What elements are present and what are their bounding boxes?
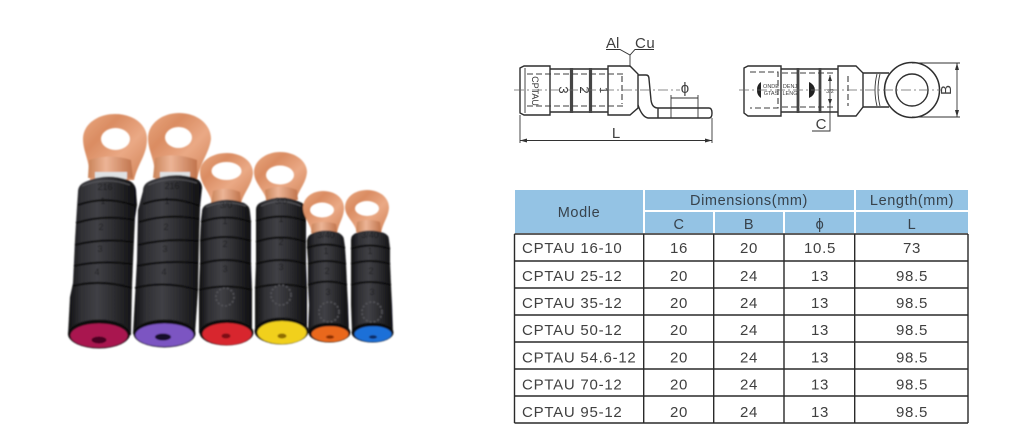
lug 4: yellow end: 3/0	[275, 196, 287, 206]
L dimension	[520, 115, 712, 143]
side view body: 2	[577, 86, 592, 94]
lug 6: blue end: 3/40	[361, 230, 379, 240]
Al and Cu labels	[606, 35, 655, 67]
row CPTAU 50-12	[522, 322, 928, 339]
product photo: six cable lugs	[68, 113, 394, 348]
row CPTAU 50-12: 98.5	[896, 322, 928, 339]
top view body: LENG	[783, 91, 797, 97]
row CPTAU 25-12: 13	[811, 268, 829, 285]
lug 1: crimson end: 3	[97, 244, 103, 254]
row CPTAU 25-12: CPTAU 25-12	[522, 268, 623, 285]
lug 2: purple end: 1	[164, 196, 170, 206]
row CPTAU 54.6-12: 20	[670, 350, 688, 366]
top view body: GTAS	[764, 91, 779, 97]
B dimension: B	[938, 85, 955, 95]
specification table	[514, 190, 968, 423]
row CPTAU 70-12	[522, 376, 928, 394]
lug 2: purple end: 3	[162, 244, 168, 254]
row CPTAU 54.6-12: 98.5	[896, 350, 928, 366]
side view body: 3	[556, 86, 571, 94]
row CPTAU 35-12	[522, 295, 928, 312]
lug 1: crimson end: 2	[98, 222, 104, 232]
row CPTAU 70-12: 98.5	[896, 376, 928, 394]
table grid	[514, 234, 968, 423]
lug 1: crimson end: 1	[100, 196, 106, 206]
top view body	[744, 66, 863, 116]
row CPTAU 35-12: 20	[670, 295, 688, 312]
row CPTAU 70-12: 13	[811, 376, 829, 394]
row CPTAU 16-10	[522, 240, 921, 257]
lug 2: purple end: 216	[164, 181, 180, 191]
row CPTAU 54.6-12: 24	[740, 350, 758, 366]
lug 6: blue end	[345, 190, 394, 342]
technical drawing: side view	[514, 35, 712, 143]
lug 6: blue end: 3	[369, 287, 375, 297]
top view body: 3/2	[826, 89, 834, 95]
row CPTAU 95-12	[522, 404, 928, 421]
table header	[515, 190, 968, 233]
lug 3: red end	[199, 153, 254, 346]
lug 3: red end: 3	[222, 264, 228, 274]
lug 6: blue end: 2	[368, 266, 374, 276]
row CPTAU 70-12: CPTAU 70-12	[522, 376, 623, 394]
row CPTAU 54.6-12: 13	[811, 350, 829, 366]
C dimension: C	[816, 116, 827, 133]
row CPTAU 35-12: 13	[811, 295, 829, 312]
Al and Cu labels: Al	[606, 35, 619, 52]
table header: B	[744, 217, 754, 233]
row CPTAU 70-12: 20	[670, 376, 688, 394]
row CPTAU 25-12: 24	[740, 268, 758, 285]
row CPTAU 95-12: 13	[811, 404, 829, 421]
side view body: CPTAU	[530, 76, 540, 106]
top view ring terminal	[863, 62, 940, 118]
lug 2: purple end: 4	[161, 267, 167, 277]
table header: ϕ	[816, 217, 824, 233]
lug 3: red end: 2	[222, 239, 228, 249]
Al and Cu labels: Cu	[635, 35, 655, 52]
lug 3: red end: 1	[222, 216, 228, 226]
lug 6: blue end: 1	[367, 246, 373, 256]
row CPTAU 16-10: 10.5	[804, 240, 836, 257]
row CPTAU 95-12: 98.5	[896, 404, 928, 421]
lug 1: crimson end	[68, 114, 147, 348]
row CPTAU 54.6-12	[522, 350, 928, 366]
row CPTAU 35-12: 24	[740, 295, 758, 312]
row CPTAU 16-10: 73	[903, 240, 921, 257]
lug 3: red end: 3/0	[220, 200, 232, 210]
lug 4: yellow end: 1	[278, 214, 284, 224]
row CPTAU 50-12: 24	[740, 322, 758, 339]
row CPTAU 95-12: 20	[670, 404, 688, 421]
row CPTAU 95-12: 24	[740, 404, 758, 421]
lug 2: purple end: 2	[163, 222, 169, 232]
B dimension	[912, 63, 960, 117]
table header: Length(mm)	[870, 193, 954, 209]
C dimension	[812, 75, 832, 133]
lug 1: crimson end: 216	[97, 182, 113, 192]
lug 4: yellow end	[254, 152, 308, 344]
lug 5: orange end: 3/40	[317, 230, 335, 240]
table header: C	[673, 217, 685, 233]
row CPTAU 50-12: CPTAU 50-12	[522, 322, 623, 339]
lug 2: purple end	[133, 113, 211, 348]
side view body	[520, 66, 638, 115]
table header: Modle	[558, 205, 600, 221]
row CPTAU 54.6-12: CPTAU 54.6-12	[522, 350, 637, 366]
row CPTAU 25-12: 20	[670, 268, 688, 285]
lug 5: orange end: 2	[324, 266, 330, 276]
row CPTAU 95-12: CPTAU 95-12	[522, 404, 623, 421]
row CPTAU 70-12: 24	[740, 376, 758, 394]
row CPTAU 16-10: 16	[670, 240, 688, 257]
side view copper tab	[638, 75, 712, 118]
lug 5: orange end	[303, 191, 350, 342]
row CPTAU 35-12: CPTAU 35-12	[522, 295, 623, 312]
L dimension: L	[612, 125, 620, 142]
side view body: 1	[597, 87, 609, 93]
row CPTAU 16-10: 20	[740, 240, 758, 257]
phi dimension	[671, 80, 698, 118]
row CPTAU 25-12	[522, 268, 928, 285]
centre line	[514, 89, 680, 91]
table header: Dimensions(mm)	[690, 193, 808, 209]
row CPTAU 50-12: 20	[670, 322, 688, 339]
row CPTAU 25-12: 98.5	[896, 268, 928, 285]
lug 5: orange end: 3	[325, 287, 331, 297]
row CPTAU 16-10: CPTAU 16-10	[522, 240, 623, 257]
phi dimension: ϕ	[681, 80, 689, 97]
row CPTAU 50-12: 13	[811, 322, 829, 339]
top view body: ONDE	[763, 84, 779, 90]
lug 1: crimson end: 4	[94, 267, 100, 277]
table header: L	[908, 217, 916, 233]
technical drawing: top view	[739, 62, 960, 133]
row CPTAU 35-12: 98.5	[896, 295, 928, 312]
lug 4: yellow end: 2	[278, 237, 284, 247]
top view body: DENJ	[783, 84, 797, 90]
top view centre line	[739, 89, 941, 91]
lug 4: yellow end: 3	[278, 262, 284, 272]
lug 5: orange end: 1	[323, 246, 329, 256]
